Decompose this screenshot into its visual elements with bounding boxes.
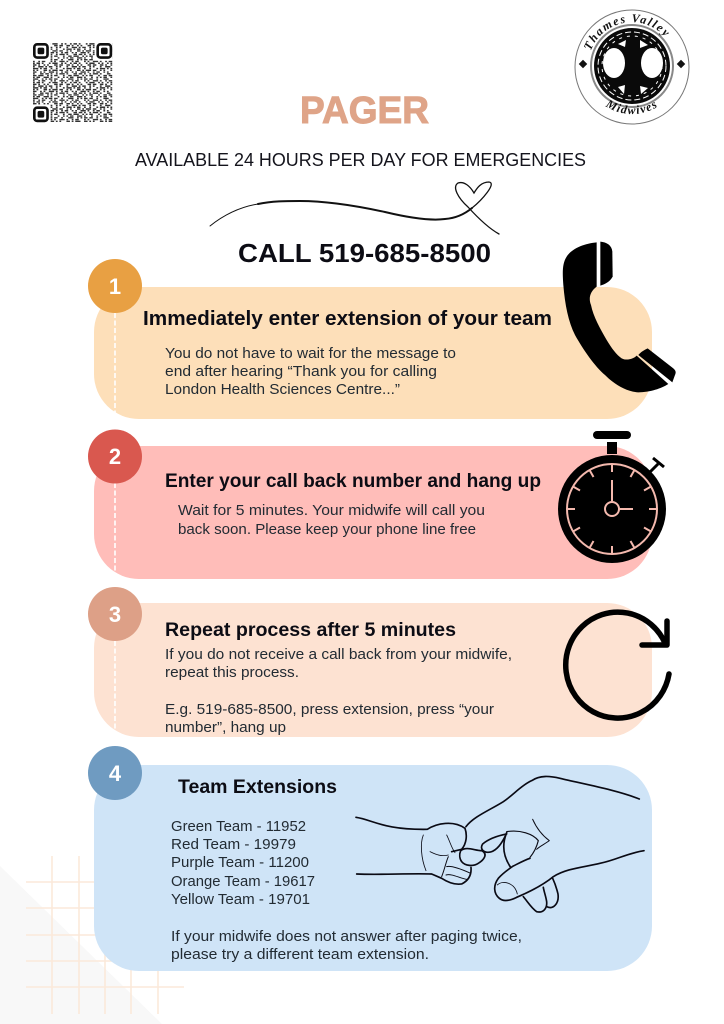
- title: PAGER: [300, 90, 429, 132]
- team list: Red Team - 19979: [171, 836, 296, 853]
- background triangle: [0, 866, 162, 1024]
- team list: [171, 818, 315, 908]
- icon: telephone: [563, 242, 676, 392]
- step 4 note: If your midwife does not answer after paging twice,: [171, 928, 522, 945]
- icon: repeat arrow: [566, 612, 669, 718]
- panel: step 3: [88, 587, 652, 737]
- step 2 badge: 2: [109, 444, 121, 469]
- panel: step 2: [88, 430, 652, 579]
- icon: adult and baby hands: [356, 776, 644, 912]
- call number: CALL 519-685-8500: [238, 238, 491, 268]
- step 2 text: Wait for 5 minutes. Your midwife will call you: [178, 502, 485, 519]
- team list: Yellow Team - 19701: [171, 891, 310, 908]
- step 3 text: E.g. 519-685-8500, press extension, press “your: [165, 701, 494, 718]
- step 2 text: back soon. Please keep your phone line free: [178, 521, 476, 538]
- team list: Purple Team - 11200: [171, 854, 309, 871]
- logo: Thames Valley Midwives: [574, 10, 690, 124]
- background grid: [26, 856, 184, 1014]
- step 1 heading: Immediately enter extension of your team: [143, 307, 552, 330]
- step 1 text: London Health Sciences Centre...”: [165, 381, 400, 398]
- step 4 heading: Team Extensions: [178, 776, 337, 798]
- step 2 badge: [88, 430, 142, 484]
- panel: step 1: [88, 259, 652, 419]
- step 3 text: If you do not receive a call back from your midwife,: [165, 646, 512, 663]
- team list: Green Team - 11952: [171, 818, 306, 835]
- team list: Orange Team - 19617: [171, 873, 315, 890]
- QR code: [33, 43, 112, 122]
- logo: Thames Valley Midwives: Midwives: [605, 100, 656, 114]
- step 3 heading: Repeat process after 5 minutes: [165, 619, 456, 641]
- step 3 text: [165, 646, 512, 736]
- step 3 text: repeat this process.: [165, 664, 299, 681]
- panel: step 4 team extensions: [88, 746, 652, 971]
- step 2 heading: Enter your call back number and hang up: [165, 470, 541, 492]
- step 2 text: [178, 502, 485, 538]
- step 1 text: [165, 345, 456, 398]
- step 1 badge: 1: [109, 274, 121, 299]
- step 4 note: please try a different team extension.: [171, 946, 429, 963]
- step 4 badge: 4: [109, 761, 122, 786]
- step 4 note: [171, 928, 522, 963]
- step 1 badge: [88, 259, 142, 313]
- subtitle: AVAILABLE 24 HOURS PER DAY FOR EMERGENCIES: [135, 150, 586, 170]
- icon: stopwatch: [558, 431, 666, 563]
- step 3 badge: [88, 587, 142, 641]
- logo: Thames Valley Midwives: Thames Valley: [584, 14, 669, 50]
- step 1 text: You do not have to wait for the message to: [165, 345, 456, 362]
- step 3 text: number”, hang up: [165, 719, 286, 736]
- step 3 badge: 3: [109, 602, 121, 627]
- step 1 text: end after hearing “Thank you for calling: [165, 363, 437, 380]
- step 4 badge: [88, 746, 142, 800]
- icon: heart swash: [210, 182, 499, 234]
- icon: tree: [603, 40, 663, 94]
